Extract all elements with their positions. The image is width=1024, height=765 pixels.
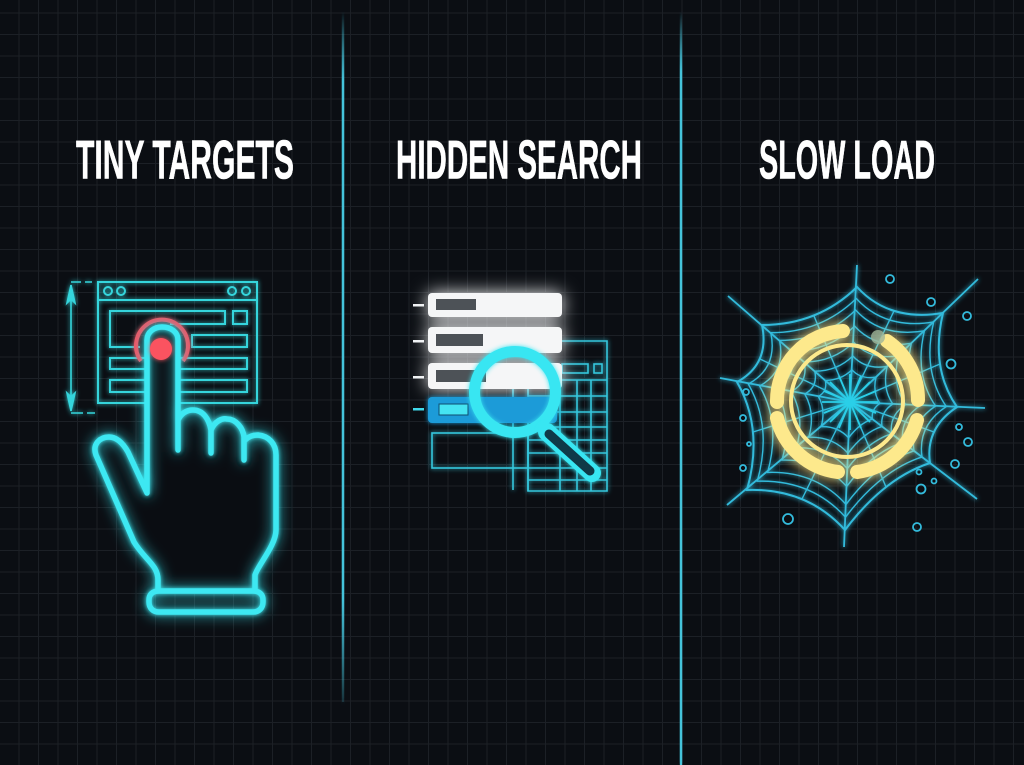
panel: hidden search icon (413, 293, 607, 491)
cyan bar label (439, 404, 468, 415)
highlighted blue bar (428, 397, 557, 423)
panel: slow load icon (720, 265, 985, 547)
loading spinner ring (777, 331, 918, 472)
browser window wireframe (98, 282, 257, 403)
data grid wireframe (432, 341, 607, 491)
stalled spinner dot (871, 330, 885, 344)
height dimension arrow (67, 282, 95, 413)
grey bar labels (436, 299, 486, 382)
divider: right (680, 12, 682, 765)
magnifying glass (474, 352, 592, 473)
tap target ring (136, 320, 188, 361)
red touch dot (150, 338, 172, 360)
white search result bars (428, 293, 562, 389)
panel: tiny targets icon (67, 282, 276, 612)
heading: tiny targets: TINY TARGETS (76, 128, 294, 190)
list tick marks (413, 304, 424, 410)
hand outline (95, 327, 276, 612)
divider: left (342, 12, 344, 702)
heading: hidden search: HIDDEN SEARCH (396, 128, 642, 190)
hand fill (95, 327, 276, 591)
spider web (720, 265, 985, 547)
floating bubbles (740, 275, 972, 531)
